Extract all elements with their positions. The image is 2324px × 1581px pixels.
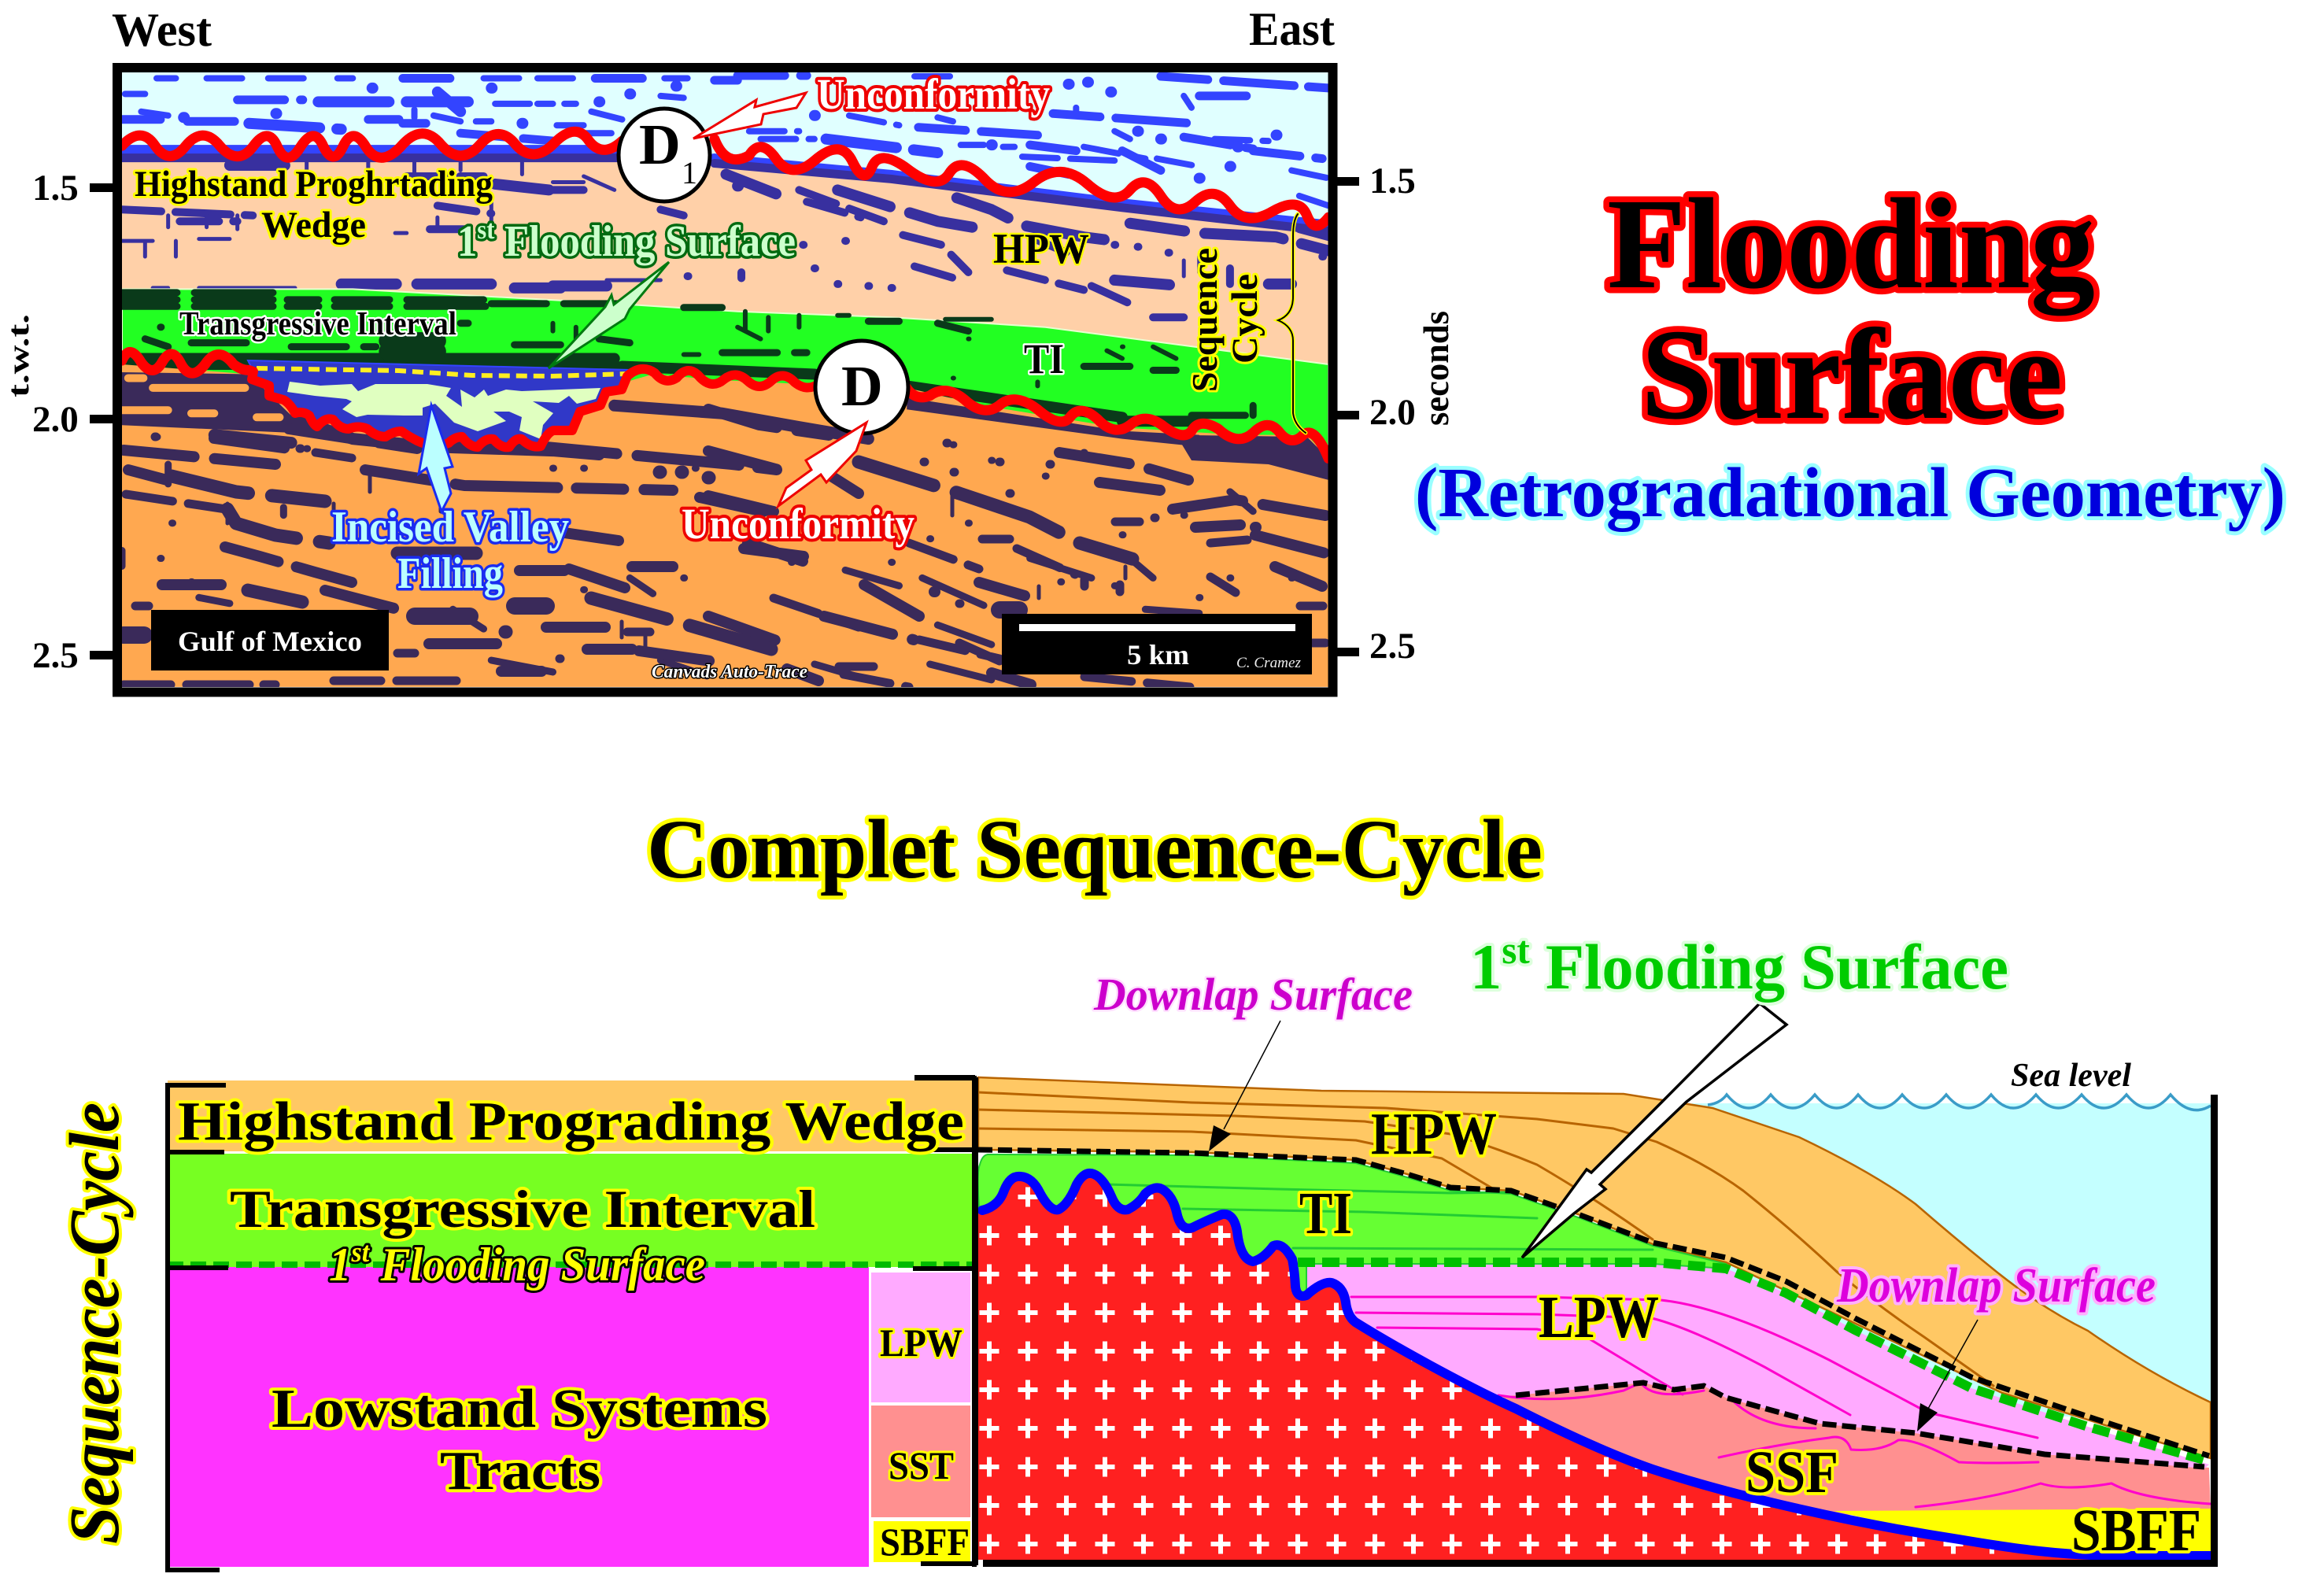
transgressive interval body [978,1154,1726,1298]
label: SSF: SSF [1746,1439,1838,1505]
label: TI: TI [1024,335,1064,382]
label: highstand wedge: Wedge [261,205,366,246]
scale bar box: C. Cramez [1236,655,1302,671]
marker: D circle: D [841,354,883,418]
label: 1st flooding surface: st [477,216,495,245]
label: highstand prograding wedge: Highstand Prograding Wedge [178,1092,964,1152]
red valley unconformity [249,369,818,447]
label: highstand wedge [135,164,493,246]
marker: D1 circle: D [639,113,681,176]
label: 1st flooding surface: st [350,1236,370,1268]
axis title: t.w.t.: t.w.t. [2,314,35,397]
marker: D1 circle [619,109,710,201]
right time axis: 1.5 [1369,161,1416,201]
label: SBFF: SBFF [880,1520,970,1564]
title: Flooding Surface: Surface [1641,302,2063,446]
arrow: upper unconformity [693,93,806,139]
box: Gulf of Mexico: Gulf of Mexico [178,626,362,657]
flooding surface yellow dashes [257,368,627,376]
label: 1st flooding surface: 1 [329,1239,353,1291]
subtitle: retrogradational geometry: (Retrogradational Geometry) [1415,454,2285,532]
label: transgressive interval: Transgressive Interval [230,1179,815,1239]
water [1692,1103,2211,1417]
label: downlap surface lower: Downlap Surface [1836,1259,2156,1313]
shelf fan yellow [1834,1509,2211,1556]
lowstand prograding wedge [1293,1262,2209,1468]
heading: Complet Sequence-Cycle: Complet Sequence-Cycle [647,803,1543,896]
title: Flooding Surface: Flooding [1607,172,2095,316]
label: incised valley filling: Incised Valley [331,503,569,552]
label: lowstand systems tracts: Tracts [440,1441,600,1502]
arrow: flooding surface pointer [549,262,669,368]
label: LPW: LPW [880,1321,962,1365]
arrow: incised valley [419,405,453,512]
box: LPW [871,1273,970,1402]
left time axis: 2.0 [32,399,79,440]
panel: seismic line [2,3,1456,693]
scale bar box: 5 km [1127,639,1189,670]
label: incised valley filling: Filling [397,549,503,598]
box: SBFF [874,1521,970,1562]
sea level waves [1708,1095,2211,1110]
basement red [978,1173,2211,1560]
frame [117,68,1333,693]
label: transgressive interval: Transgressive Interval [179,306,456,342]
left time axis: 2.5 [32,635,79,676]
green transgressive interval [122,288,1328,445]
first flooding surface dashed green [1298,1262,2209,1461]
label: SST: SST [889,1443,954,1487]
incised valley fill [248,360,630,447]
title: Flooding Surface [1607,172,2095,446]
label: 1st flooding surface: 1 [457,217,479,266]
valley pale sediment [287,382,600,439]
seismic interpretation image [122,72,1328,687]
label: 1st flooding surface upper: 1 [1470,931,1502,1003]
panel: systems tract column [165,1075,977,1572]
lowstand salmon slope fan [1498,1383,2211,1515]
band: transgressive interval [168,1154,974,1267]
box: SST [871,1406,970,1517]
lower seismic dark reflectors [124,409,1325,687]
label: SBFF: SBFF [2071,1498,2201,1564]
label: sequence cycle [1184,248,1265,392]
label: highstand wedge: Highstand Proghrtading [135,164,493,205]
marker: D circle [815,341,908,434]
label: 1st flooding surface: Flooding Surface [495,217,796,266]
label: lower unconformity: Unconformity [682,500,914,548]
label: 1st flooding surface upper: Flooding Surface [1530,931,2008,1003]
scale bar box [1002,614,1312,674]
unconformity blue line [982,1173,2211,1556]
box: Gulf of Mexico [151,610,389,670]
peach highstand wedge interval [122,156,1328,364]
arrow: lower downlap pointer [1917,1320,1978,1431]
lower downlap dashed black [1516,1383,2204,1467]
brace: sequence cycle extent [1278,214,1306,433]
right time axis: 2.5 [1369,626,1416,667]
credit: Canvads Auto-Trace: Canvads Auto-Trace [652,662,807,682]
axis title: seconds: seconds [1417,311,1456,426]
band: highstand prograding wedge [168,1080,974,1151]
label: west: West [112,4,212,56]
basement plus pattern [978,1173,2211,1560]
left time axis [32,168,113,676]
right time axis [1337,161,1416,667]
label: 1st flooding surface upper: st [1502,928,1530,972]
label: LPW: LPW [1539,1284,1659,1350]
label: TI: TI [1299,1180,1352,1247]
red unconformity D1 and D [122,131,1328,459]
column brackets [165,1075,977,1572]
label: lowstand systems tracts [272,1379,767,1502]
band: lowstand systems tracts [168,1267,869,1567]
label: sea level: Sea level [2011,1058,2131,1094]
left time axis: 1.5 [32,168,79,209]
label: east: East [1249,3,1335,55]
arrow: first flooding surface pointer [1522,1003,1786,1258]
frame bars [976,1077,2218,1567]
label: 1st flooding surface: Flooding Surface [369,1239,705,1291]
highstand wedge body [978,1077,2211,1458]
label: downlap surface upper: Downlap Surface [1093,969,1413,1020]
label: sequence cycle: Sequence [1184,248,1225,392]
label: sequence cycle: Cycle [1225,274,1265,364]
label: HPW: HPW [993,225,1089,272]
lower orange seismic unit [122,364,1328,687]
arrow: lower unconformity [778,423,866,506]
label: incised valley filling [331,503,569,598]
label: upper unconformity: Unconformity [817,70,1050,118]
marker: D1 circle: 1 [682,155,697,190]
label: HPW: HPW [1371,1101,1497,1167]
upper downlap dashed black [978,1150,2209,1456]
label: lowstand systems tracts: Lowstand Systems [272,1379,767,1439]
arrow: upper downlap pointer [1209,1021,1280,1151]
right time axis: 2.0 [1369,392,1416,433]
vertical label: Sequence-Cycle: Sequence-Cycle [56,1103,134,1544]
panel: stratigraphic cross-section [976,1003,2218,1567]
